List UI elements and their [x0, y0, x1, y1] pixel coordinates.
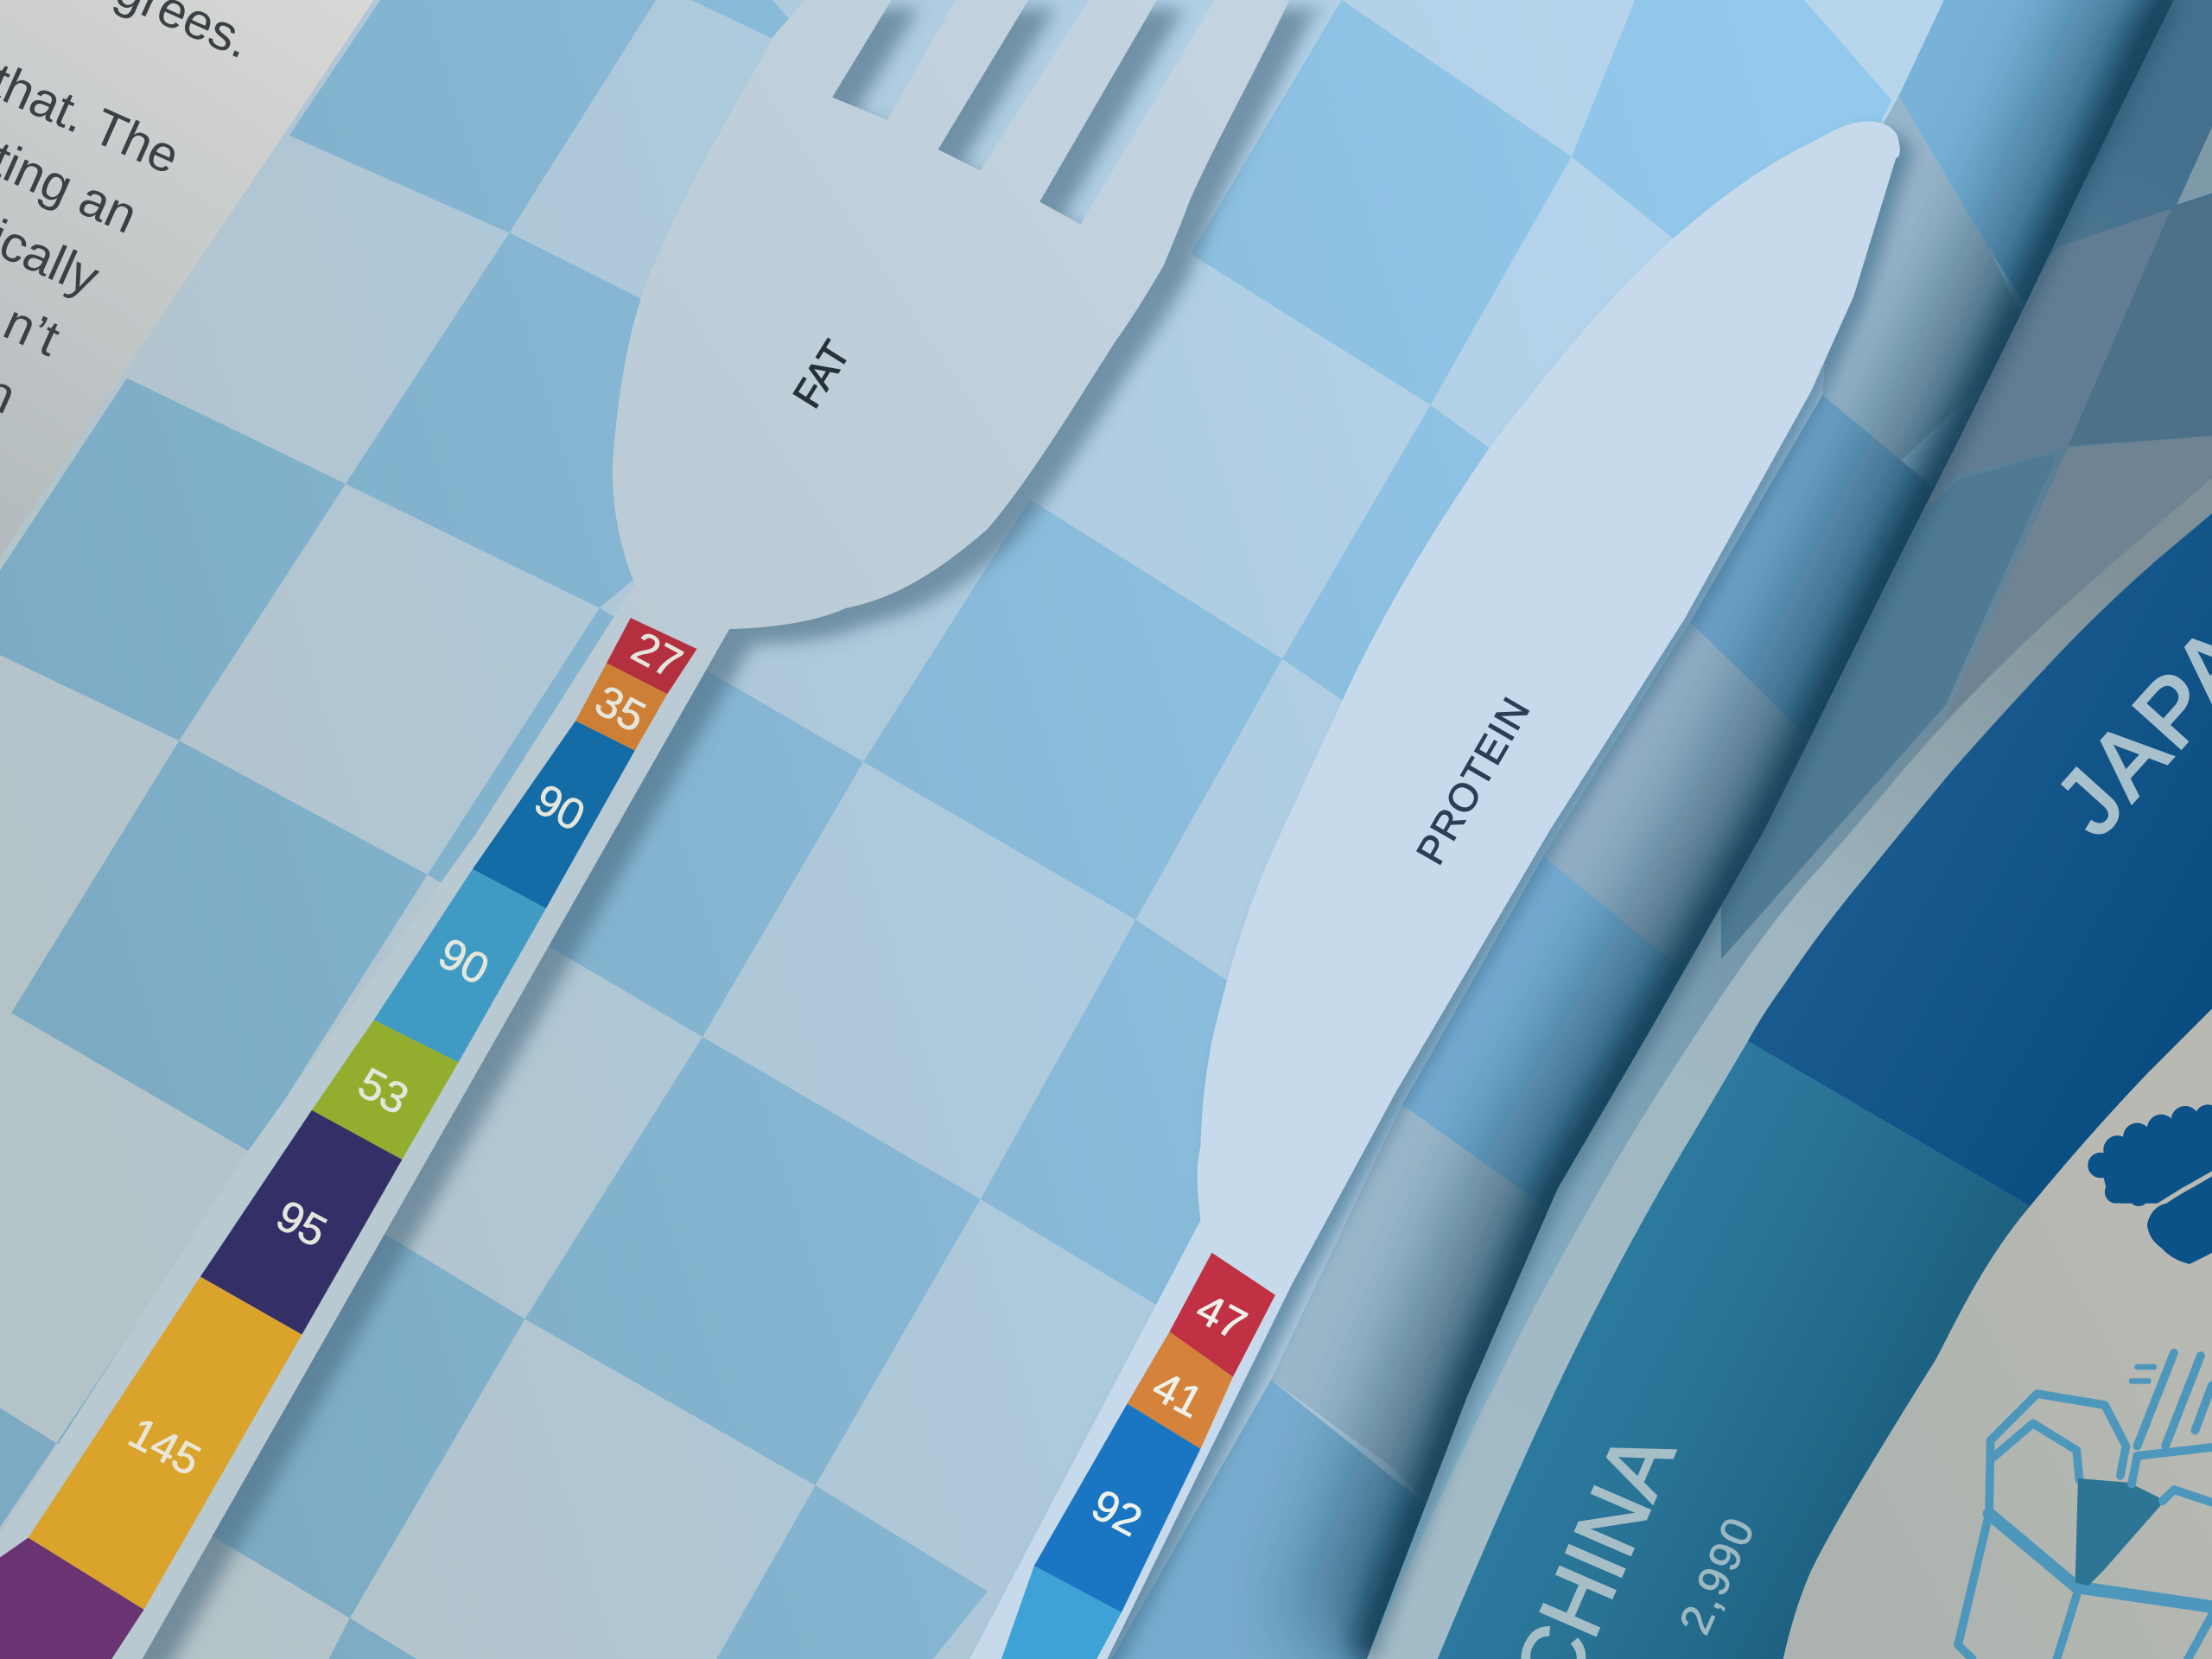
fork segment 95: 95: [269, 1191, 334, 1256]
fork segment 90 dark blue: 90: [527, 774, 593, 841]
fork shadow: [0, 9, 1327, 1659]
shadow along the book fold: [1367, 0, 2179, 1659]
fork segment 145: 145: [121, 1408, 208, 1485]
knife segment 47: [1169, 1253, 1275, 1376]
knife segment 41: 41: [1145, 1361, 1211, 1427]
fork segment 90 light blue: [374, 869, 546, 1062]
knife segment 92: [1034, 1403, 1200, 1612]
gutter page tiles: [1100, 0, 2174, 1659]
knife segment light blue: [995, 1566, 1122, 1659]
knife segment 92: 92: [1084, 1479, 1150, 1546]
knife label: PROTEIN: [1408, 690, 1539, 872]
knife: protein breakdown: [959, 121, 1900, 1659]
right page pattern tiles: [1721, 127, 2212, 959]
fork segment 53: 53: [351, 1058, 416, 1124]
ring segment: Japan: [1748, 513, 2212, 1206]
fork: fat breakdown: [0, 0, 1305, 1659]
knife shadow: [970, 130, 1911, 1659]
fork segment 53: [312, 1020, 459, 1160]
ring segment: China: 2,990: [1669, 1508, 1764, 1641]
fork segment 90 dark blue: [473, 721, 635, 908]
left text page: [0, 0, 374, 557]
icon: broccoli: [2089, 1106, 2212, 1262]
fork segment 27: [607, 618, 697, 694]
fork segment 35: [575, 663, 667, 751]
fork segment 95: [200, 1110, 402, 1334]
fork segment 35: 35: [588, 676, 653, 741]
body copy fragments: [0, 0, 259, 425]
fork segment purple: [0, 1538, 144, 1659]
fork segment 90 light blue: 90: [431, 928, 497, 995]
outer pale ring: [1367, 478, 2212, 1659]
plate centre: [1783, 1008, 2212, 1659]
knife segment 47: 47: [1188, 1283, 1255, 1350]
fork segment 27: 27: [624, 622, 690, 688]
fork segment 145: [29, 1277, 302, 1610]
icon: takeout box: [1958, 1353, 2212, 1659]
ring segment: China: [1438, 1041, 2030, 1659]
book fold line: [1367, 0, 2174, 1659]
fork label: FAT: [785, 333, 859, 416]
knife segment 41: [1127, 1332, 1233, 1449]
right page: [1354, 0, 2212, 1659]
